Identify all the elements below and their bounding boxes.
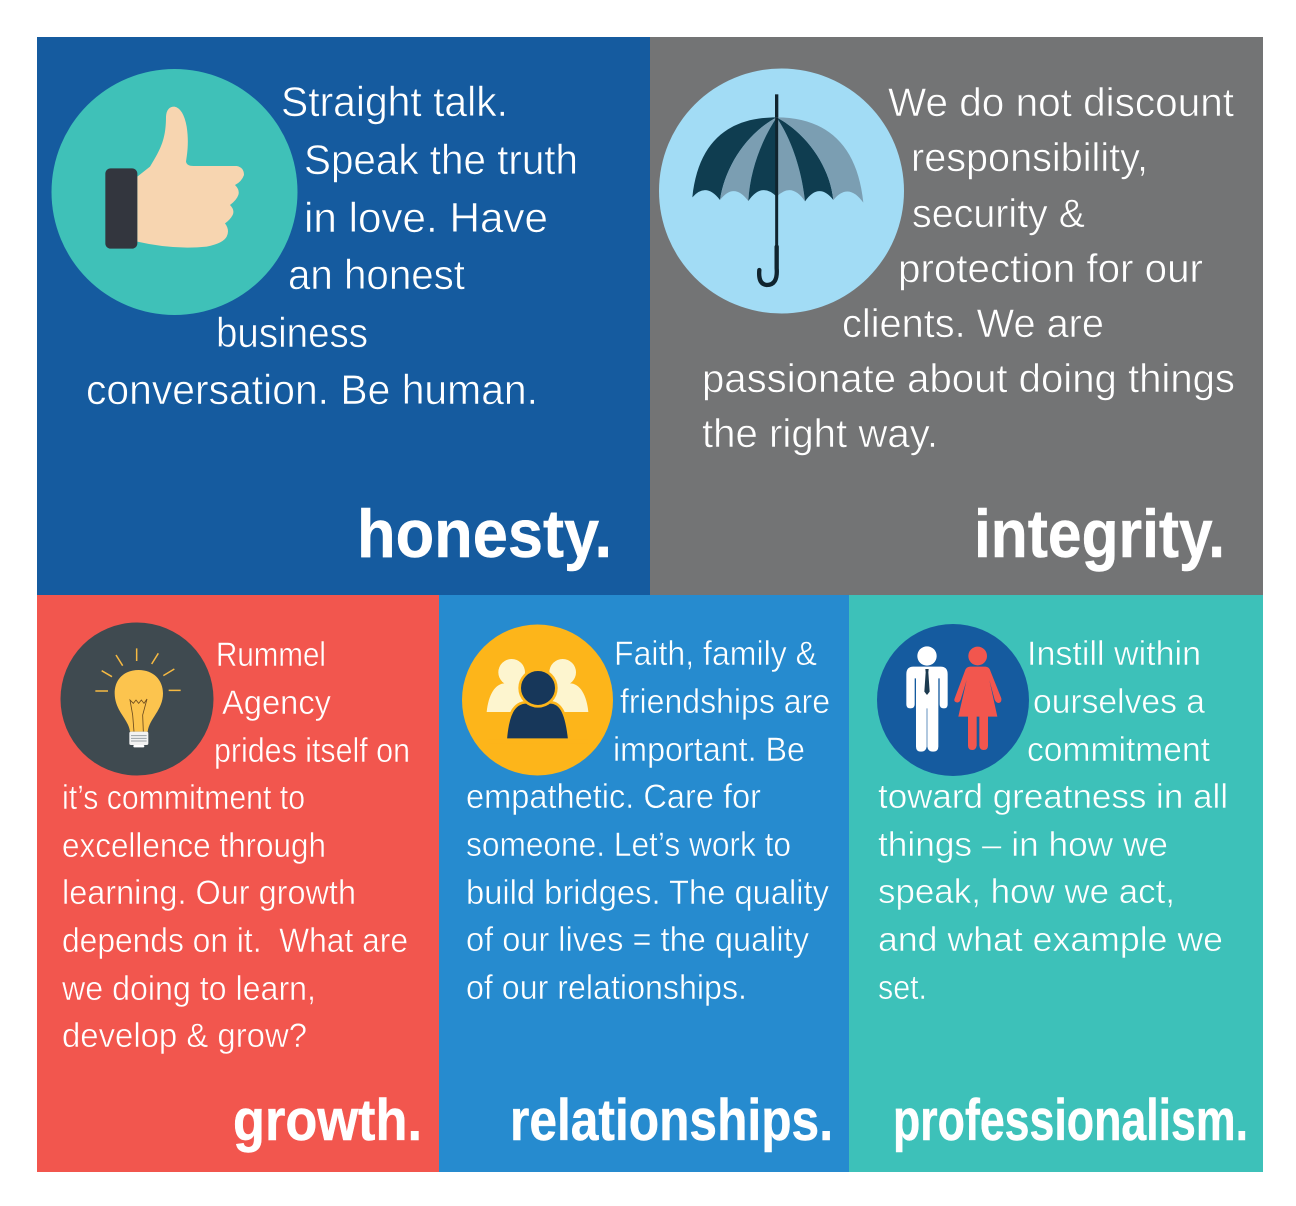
text: integrity description: passionate about doing things [702, 357, 1235, 401]
text: relationships description: important. Be [613, 731, 805, 769]
text: honesty description: an honest [288, 251, 465, 298]
text: honesty description: Straight talk. [281, 78, 508, 125]
text: honesty description: Speak the truth [304, 136, 578, 183]
text: growth description: we doing to learn, [61, 970, 316, 1008]
text: professionalism description: speak, how we act, [878, 873, 1175, 911]
text: growth description: learning. Our growth [62, 874, 356, 912]
heading: honesty: honesty. [357, 496, 612, 572]
icon: thumbs up [52, 69, 298, 315]
text: integrity description: We do not discount [888, 81, 1234, 125]
text: relationships description: someone. Let’s work to [466, 826, 791, 864]
text: relationships description: of our relationships. [466, 969, 747, 1007]
text: growth description: depends on it. What are [62, 922, 408, 960]
text: growth description: excellence through [62, 827, 326, 865]
text: growth description [61, 636, 410, 1055]
heading: integrity: integrity. [974, 496, 1225, 572]
text: professionalism description [878, 635, 1228, 1007]
text: professionalism description: set. [878, 969, 927, 1007]
text: growth description: prides itself on [214, 732, 410, 770]
text: professionalism description: things – in how we [878, 826, 1168, 864]
text: relationships description: friendships are [620, 683, 830, 721]
panel: integrity [650, 37, 1263, 595]
text: integrity description: clients. We are [842, 302, 1104, 346]
panel: relationships [439, 595, 849, 1172]
text: relationships description: build bridges. The quality [466, 874, 829, 912]
text: professionalism description: toward greatness in all [878, 778, 1228, 816]
text: integrity description [702, 81, 1235, 456]
text: integrity description: protection for our [898, 247, 1203, 291]
heading: relationships: relationships. [510, 1088, 833, 1153]
text: growth description: Rummel [216, 636, 326, 674]
icon: group of people [462, 624, 613, 776]
icon: man and woman [877, 624, 1029, 776]
text: professionalism description: ourselves a [1033, 683, 1205, 721]
text: relationships description: empathetic. Care for [466, 778, 761, 816]
panel: honesty [37, 37, 650, 595]
text: honesty description: conversation. Be human. [86, 366, 538, 413]
icon: umbrella [659, 68, 904, 314]
text: growth description: it’s commitment to [62, 779, 305, 817]
heading: growth: growth. [233, 1088, 422, 1153]
text: relationships description: of our lives = the quality [466, 921, 809, 959]
text: honesty description: in love. Have [304, 194, 548, 241]
text: growth description: Agency [222, 684, 331, 722]
text: integrity description: responsibility, [911, 136, 1148, 180]
text: professionalism description: Instill within [1027, 635, 1201, 673]
text: professionalism description: commitment [1027, 731, 1211, 769]
panel: professionalism [849, 595, 1263, 1172]
icon: light bulb [60, 622, 214, 776]
text: honesty description: business [216, 309, 368, 356]
panel: growth [37, 595, 439, 1172]
text: relationships description: Faith, family & [614, 635, 817, 673]
text: integrity description: the right way. [702, 412, 938, 456]
text: relationships description [466, 635, 830, 1007]
text: honesty description [86, 78, 578, 413]
text: professionalism description: and what example we [878, 921, 1223, 959]
text: integrity description: security & [912, 192, 1085, 236]
text: growth description: develop & grow? [62, 1017, 307, 1055]
